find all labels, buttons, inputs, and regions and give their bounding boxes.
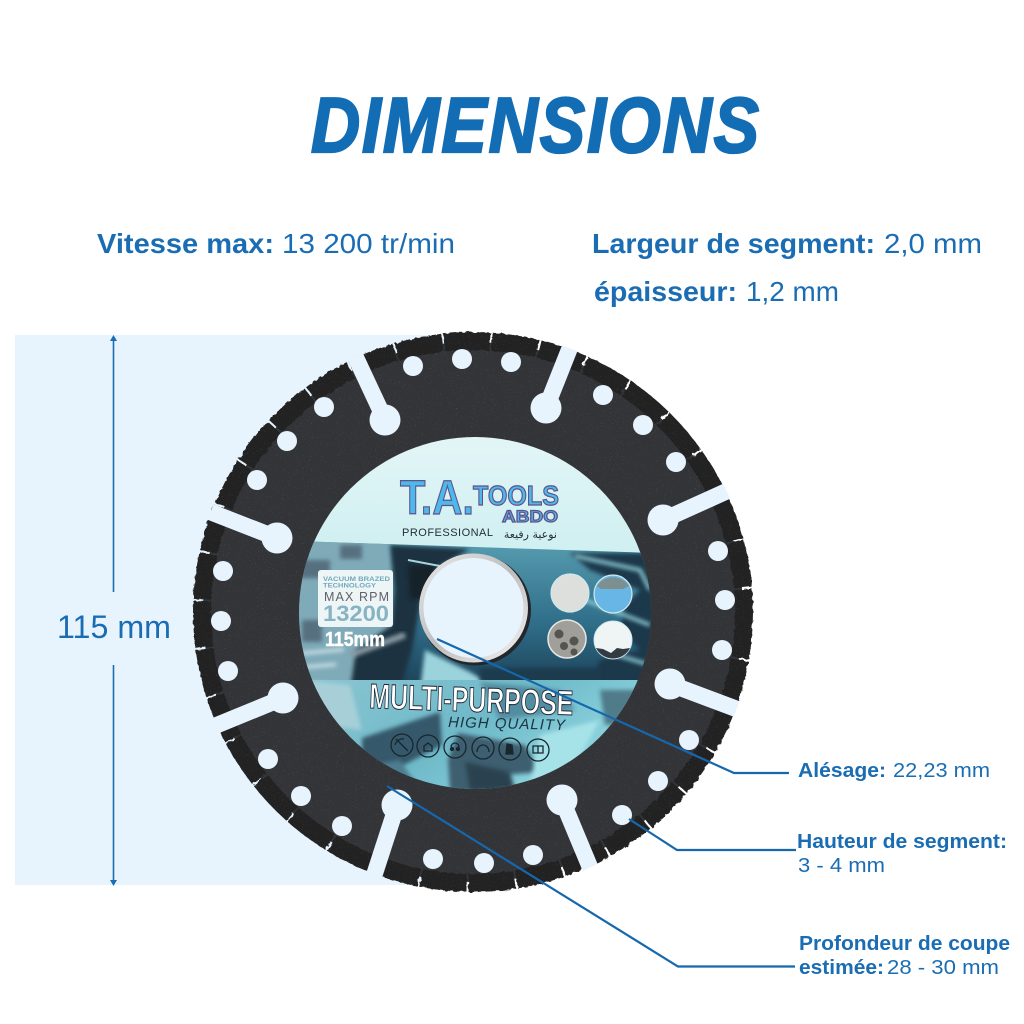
label text: professional: PROFESSIONAL xyxy=(402,527,493,539)
material photos xyxy=(548,574,632,659)
label: upper pale area xyxy=(308,437,642,555)
label: gear photo band xyxy=(295,535,660,690)
callout: alesage: Alésage: xyxy=(798,760,886,782)
spec: vitesse max: 13 200 tr/min xyxy=(282,228,455,259)
badge: max rpm: MAX RPM xyxy=(324,590,389,604)
callout: profondeur de coupe xyxy=(799,933,1010,979)
label text: professional xyxy=(402,527,557,541)
label text: multi-purpose: MULTI-PURPOSE xyxy=(369,677,574,723)
segmented abrasive rim xyxy=(202,341,744,883)
spec: epaisseur: épaisseur: xyxy=(594,276,737,307)
spec: epaisseur xyxy=(594,276,839,307)
callout: alesage xyxy=(798,760,990,782)
logo: T.A. TOOLS ABDO: ABDO xyxy=(502,507,558,526)
leader line: profondeur de coupe xyxy=(387,786,795,966)
spec: epaisseur: 1,2 mm xyxy=(746,276,839,307)
label text: professional: نوعية رفيعة xyxy=(504,528,557,541)
photo: steel tubes xyxy=(548,620,586,658)
cooling holes xyxy=(211,349,735,873)
spec: largeur de segment xyxy=(592,228,982,259)
badge: max rpm xyxy=(318,570,393,627)
callout: profondeur de coupe: Profondeur de coupe xyxy=(799,933,1010,955)
speckled grit texture xyxy=(190,330,760,900)
callout: profondeur de coupe: estimée: xyxy=(799,957,884,979)
cutting disc xyxy=(190,330,760,900)
panel: light blue backdrop xyxy=(15,335,475,885)
logo: T.A. TOOLS ABDO: TOOLS xyxy=(473,480,559,511)
spec: largeur de segment: 2,0 mm xyxy=(884,228,982,259)
badge: max rpm: VACUUM BRAZED xyxy=(323,576,390,583)
logo: T.A. TOOLS ABDO xyxy=(400,472,559,526)
disc label xyxy=(295,430,660,800)
expansion slots xyxy=(200,340,750,882)
callout: alesage: 22,23 mm xyxy=(893,760,990,782)
callout: hauteur de segment xyxy=(797,831,1007,877)
gear photo: mid shadow below hole right xyxy=(476,667,596,680)
arbor hole with silver ring xyxy=(419,554,531,666)
disc body xyxy=(203,342,743,882)
spec: vitesse max: Vitesse max: xyxy=(97,228,274,259)
gear photo: right dark gear xyxy=(570,553,655,685)
leader line: alesage xyxy=(437,639,789,773)
photo: stone xyxy=(551,574,589,612)
label text: high quality: HIGH QUALITY xyxy=(448,714,566,734)
title: DIMENSIONS xyxy=(311,83,759,169)
dimension label: 115 mm: 115 mm xyxy=(57,609,171,645)
photo: white pipes xyxy=(594,621,632,659)
label: lower teal band xyxy=(312,680,638,789)
badge: max rpm: 13200 xyxy=(323,601,389,626)
badge: max rpm: TECHNOLOGY xyxy=(323,582,377,590)
callout: hauteur de segment: Hauteur de segment: xyxy=(797,831,1007,853)
dimension arrow: 115 mm xyxy=(110,335,117,886)
logo: T.A. TOOLS ABDO: T.A. xyxy=(400,472,474,525)
gear photo: neck below hole xyxy=(418,648,482,680)
spec: vitesse max xyxy=(97,228,455,259)
callout: profondeur de coupe: 28 - 30 mm xyxy=(887,957,999,979)
spec: largeur de segment: Largeur de segment: xyxy=(592,228,875,259)
gear photo: left blurred area xyxy=(295,535,392,690)
leader line: hauteur de segment xyxy=(629,819,796,850)
gear photo: dark tooth above hole xyxy=(350,545,470,690)
photo: corrugated metal xyxy=(594,575,632,613)
callout: hauteur de segment: 3 - 4 mm xyxy=(798,855,885,877)
label text: 115mm: 115mm xyxy=(325,629,385,651)
material icons row xyxy=(391,734,549,761)
